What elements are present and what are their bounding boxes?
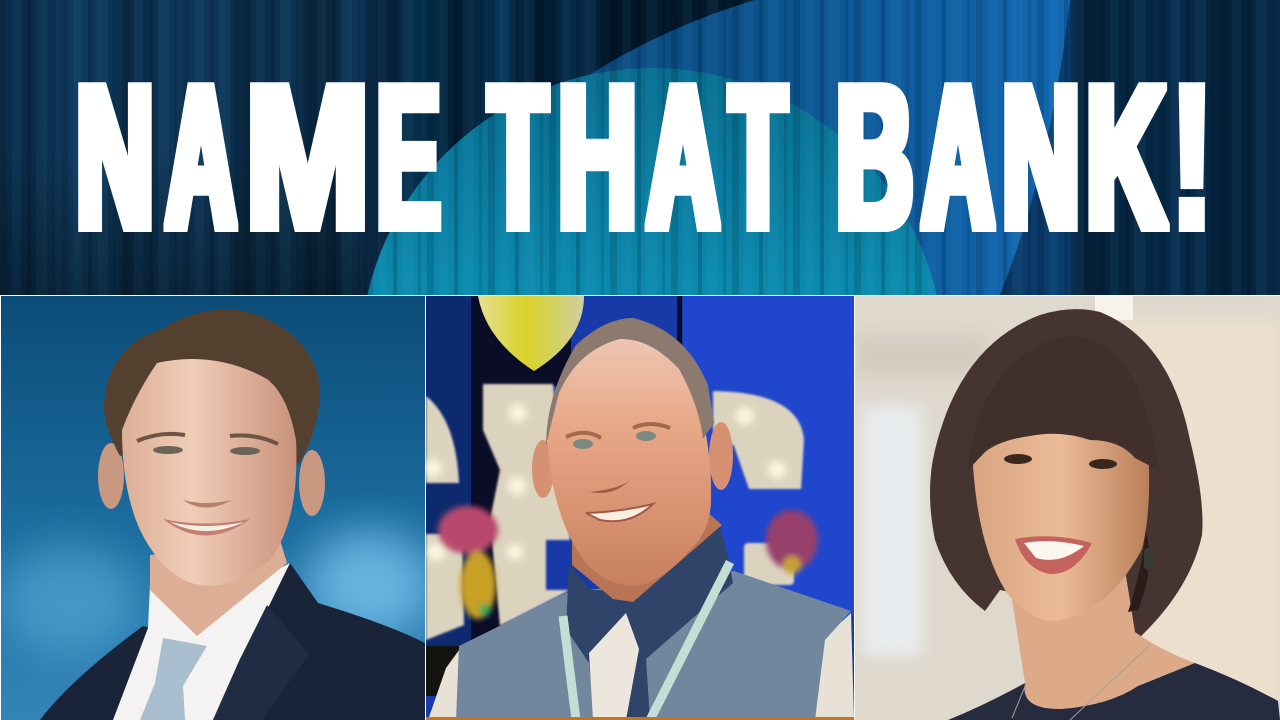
eyes: [573, 431, 656, 449]
marquee letters: [426, 384, 804, 640]
title: H: [558, 42, 637, 272]
black table edge: [426, 646, 460, 696]
title: !: [1173, 42, 1211, 272]
party decorations: [438, 506, 818, 619]
hair shadow by neck: [1128, 530, 1149, 612]
title: M: [245, 42, 370, 272]
dark navy dress: [948, 663, 1280, 720]
nose shadow: [590, 479, 631, 493]
orange bottom edge: [426, 717, 854, 720]
panel: right portrait, woman with dark bob: [855, 296, 1280, 720]
title: E: [377, 42, 440, 272]
grey vest: [456, 571, 851, 720]
hair back: [104, 309, 320, 466]
title: A: [166, 42, 236, 272]
face: [548, 337, 711, 586]
neck and chest: [1010, 570, 1195, 720]
navy collar: [566, 523, 733, 720]
lanyard: [563, 562, 730, 720]
eyes: [1004, 454, 1117, 469]
eyebrows: [566, 424, 670, 438]
fringe: [968, 336, 1158, 470]
ears: [98, 443, 325, 516]
necklace: [1012, 645, 1150, 720]
face: [972, 422, 1149, 621]
panel: title banner: [0, 0, 1280, 295]
neck: [572, 510, 722, 602]
hair back: [930, 309, 1202, 639]
spotlight circle: [367, 68, 936, 295]
title: T: [489, 42, 547, 272]
hair: [546, 318, 714, 446]
smile: [1015, 536, 1092, 574]
ears: [532, 422, 733, 498]
eyes: [153, 446, 260, 455]
lapel: [213, 605, 309, 720]
balloon: [478, 296, 584, 371]
eyebrows: [137, 434, 278, 444]
shirt placket: [589, 613, 639, 720]
title: N: [1002, 42, 1080, 272]
smile: [586, 504, 653, 521]
nose shadow: [183, 500, 232, 508]
panel: middle portrait, man at party with balloon: [424, 296, 854, 720]
earring: [1144, 548, 1153, 570]
title: A: [647, 42, 719, 272]
necktie: [140, 638, 207, 720]
curved light swoosh: [367, 0, 1070, 295]
panel: left portrait, man in navy suit: [0, 296, 435, 720]
title: B: [836, 42, 913, 272]
suit jacket: [40, 563, 425, 720]
title: A: [922, 42, 994, 272]
shirt collar: [113, 563, 290, 720]
face: [122, 359, 296, 586]
title: N: [76, 42, 154, 272]
neck: [150, 540, 287, 636]
shirt sleeves: [428, 613, 854, 720]
marquee bulbs: [424, 404, 786, 561]
title: K: [1086, 42, 1166, 272]
title: T: [730, 42, 786, 272]
smile: [163, 519, 250, 536]
